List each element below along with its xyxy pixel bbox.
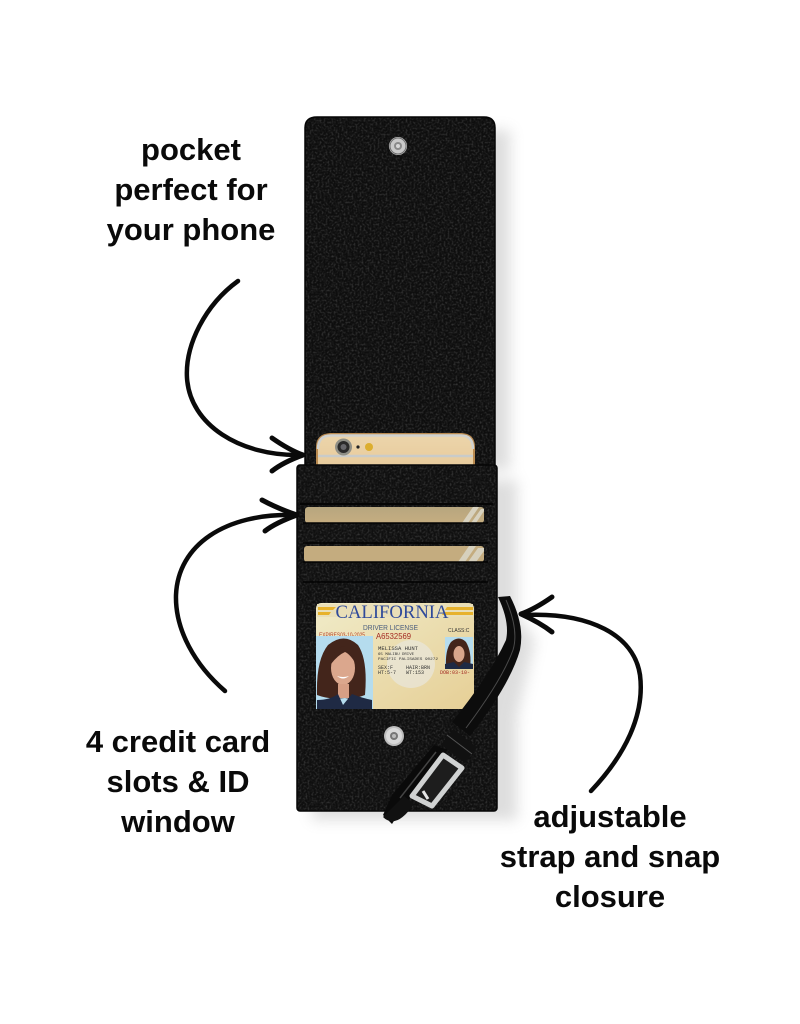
ID text: CLASS:C: [448, 628, 470, 634]
wallet drop shadow: [312, 130, 535, 820]
ID window: HT:5-7: [378, 670, 396, 676]
caption: phone pocket: [106, 132, 275, 247]
ID text: DRIVER LICENSE: [363, 623, 418, 632]
open wallet: [297, 117, 521, 824]
ID window: WT:153: [406, 670, 424, 676]
phone: [316, 433, 475, 466]
caption: strap: closure: [555, 879, 665, 914]
ID window: SEX:F: [378, 665, 393, 671]
caption: strap: strap and snap: [500, 839, 720, 874]
arrow: to strap: [521, 597, 641, 791]
ID text: A6532569: [376, 632, 412, 641]
caption: phone pocket: perfect for: [114, 172, 268, 207]
caption: phone pocket: pocket: [141, 132, 241, 167]
ID window: 65 MALIBU DRIVE: [378, 653, 415, 657]
arrow: to phone pocket: [187, 281, 303, 471]
flap snap: [389, 137, 407, 155]
small ID portrait: [445, 637, 473, 669]
caption: card slots: window: [121, 804, 235, 839]
ID window: DOB:03-10-: [440, 670, 470, 676]
wallet flap: [305, 117, 495, 470]
credit card slots: [303, 507, 489, 602]
ID window: [316, 602, 474, 709]
caption: card slots: 4 credit card: [86, 724, 270, 759]
arrow: to card slots: [176, 500, 297, 691]
ID text: [319, 623, 470, 641]
strap buckle: [412, 755, 462, 806]
caption: strap: adjustable: [533, 799, 687, 834]
strap: [383, 596, 521, 824]
ID window: MELISSA HUNT: [378, 645, 419, 652]
pocket snap: [384, 726, 404, 746]
caption: phone pocket: your phone: [107, 212, 275, 247]
caption: strap: [500, 799, 720, 914]
ID text: EXPIRES03-10-2025: [319, 633, 366, 639]
ID window: HAIR:BRN: [406, 665, 430, 671]
caption: card slots: [86, 724, 270, 839]
front pocket: [297, 465, 497, 811]
ID window: PACIFIC PALISADES 90272: [378, 658, 439, 662]
ID header band: CALIFORNIA: [336, 602, 449, 623]
large ID portrait: [316, 636, 373, 709]
caption: card slots: slots & ID: [107, 764, 249, 799]
